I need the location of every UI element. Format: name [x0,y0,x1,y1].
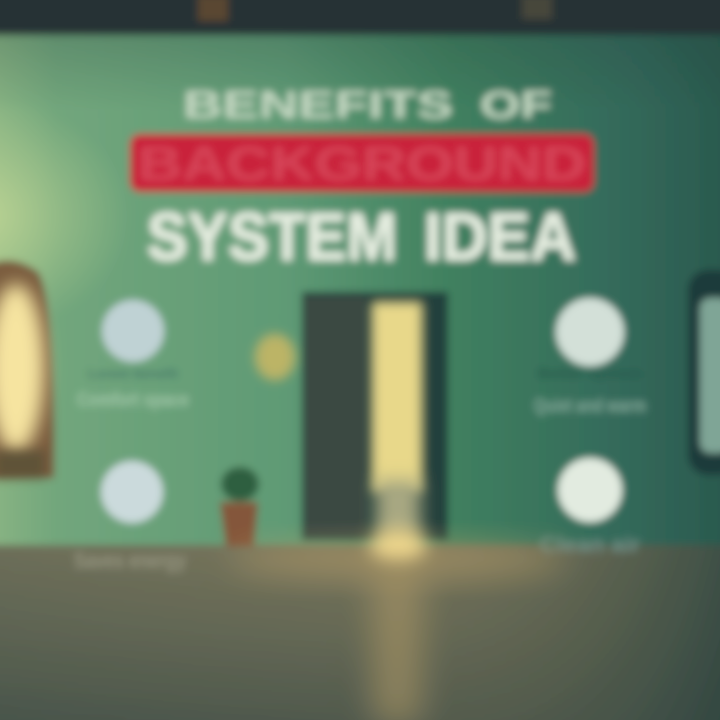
text block: top-left caption [77,366,189,411]
text block: bottom-left caption: Saves energy [74,548,187,573]
text block: top-left caption: Comfort space [77,390,189,411]
left arched window [0,260,54,480]
wall lamp glow [255,334,295,380]
icon: top-left circle [102,300,164,362]
text block: top-right caption: Better system [538,365,642,381]
title: third line [147,199,576,275]
text block: top-left caption: Lorem benefit [88,366,179,381]
title: third line: SYSTEM [147,199,397,275]
title: first line [183,84,552,127]
icon: bottom-right circle [558,458,622,522]
potted plant [220,467,259,546]
text block: top-right caption [534,365,646,417]
icon: top-right circle [556,298,624,366]
text block: bottom-right caption: Clean air [540,532,640,557]
right arched window [688,270,720,475]
title: third line: IDEA [424,199,576,275]
title: red banner line [130,134,594,192]
title: first line: OF [480,84,552,127]
doorway [302,292,448,540]
title: red banner line: BACKGROUND [138,138,586,191]
title: first line: BENEFITS [183,84,453,127]
background wall [0,0,720,570]
floor [0,545,720,720]
top ceiling strip [0,0,720,35]
text block: top-right caption: Quiet and warm [534,396,646,417]
icon: bottom-left circle [101,461,163,523]
floor light reflection [228,529,568,720]
